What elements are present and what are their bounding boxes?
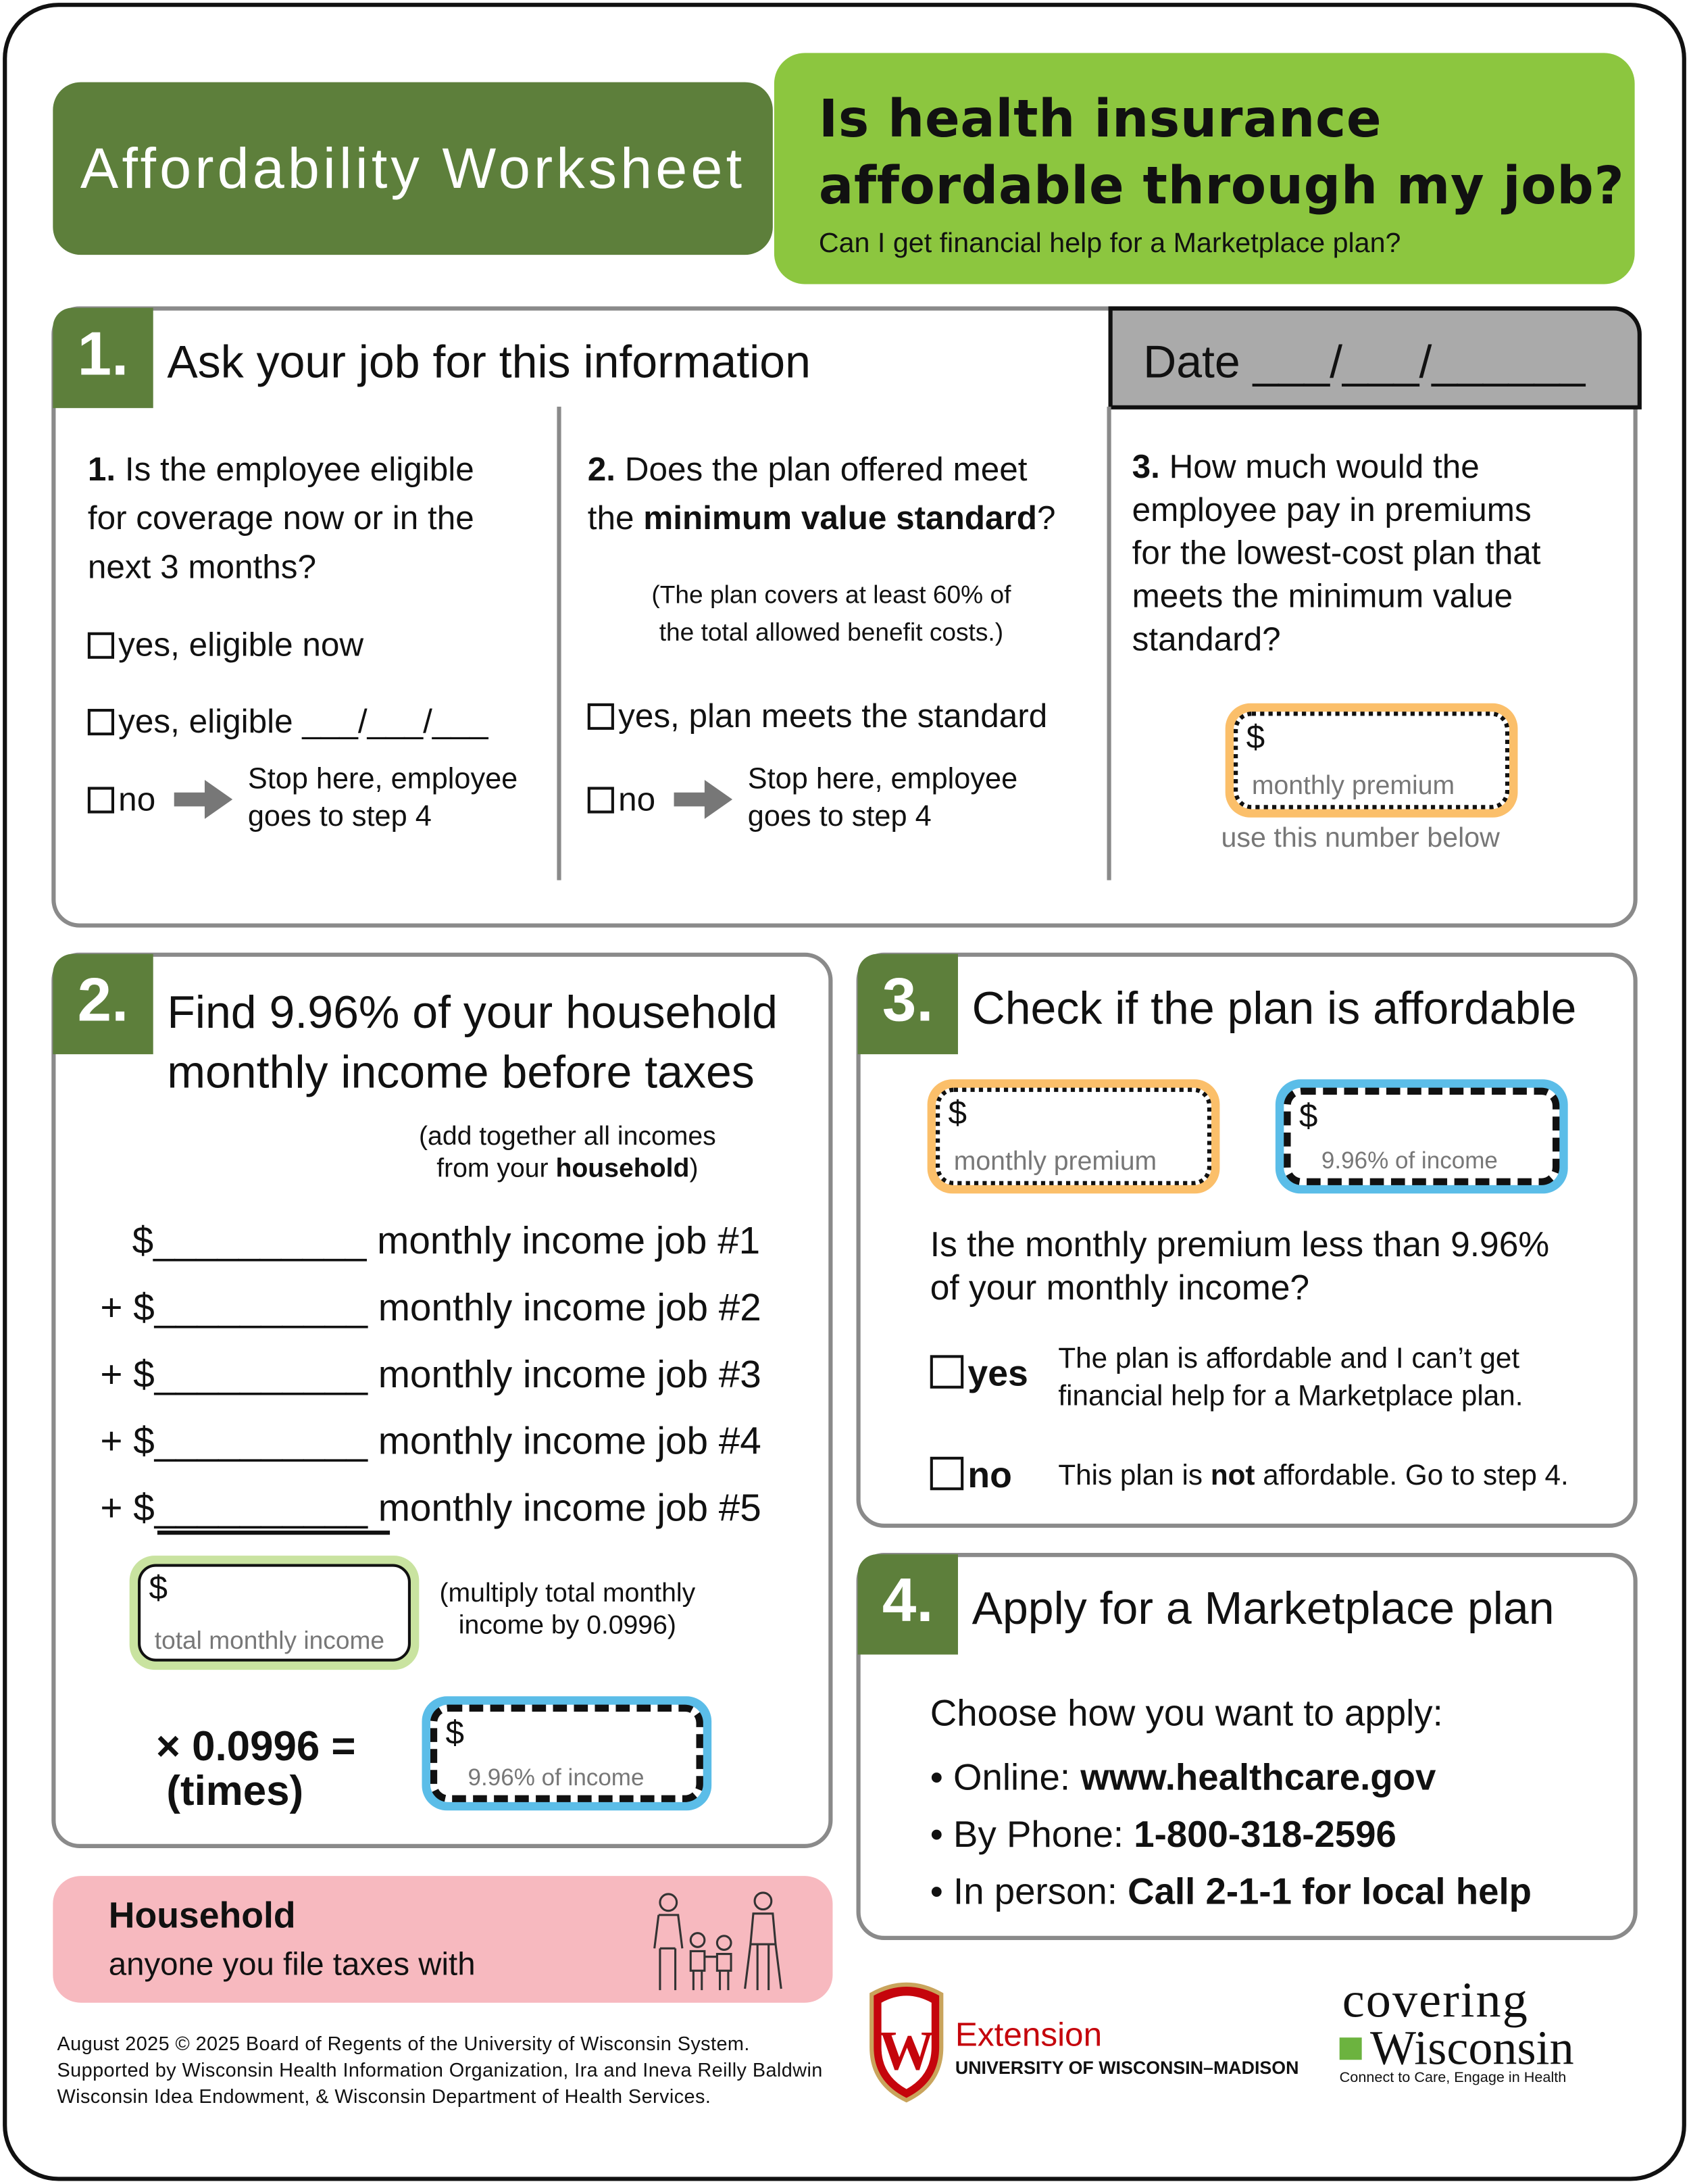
text: yes, plan meets the standard [618, 698, 1047, 735]
headline [819, 89, 1624, 216]
times: × 0.0996 = [156, 1724, 356, 1770]
no option: no [967, 1454, 1012, 1496]
step 2 heading: monthly income before taxes [167, 1046, 755, 1097]
income lines: + $__________ monthly income job #3 [100, 1352, 761, 1395]
footer credits: Wisconsin Idea Endowment, & Wisconsin Department of Health Services. [57, 2085, 711, 2107]
text: no [118, 781, 155, 819]
footer credits [57, 2032, 823, 2107]
yes option: yes [967, 1352, 1028, 1394]
panel: step 3 [857, 953, 1638, 1528]
number 1: 1. [78, 320, 128, 389]
note [419, 1122, 716, 1184]
income box: $ [1299, 1097, 1317, 1135]
logo: covering Wisconsin [1339, 1972, 1574, 2086]
multiply note: income by 0.0996) [459, 1612, 676, 1641]
question [930, 1226, 1549, 1308]
note: (add together all incomes [419, 1122, 716, 1151]
column: eligibility [88, 451, 518, 833]
question: of your monthly income? [930, 1269, 1309, 1308]
text: no [618, 781, 655, 819]
yes option [930, 1352, 1028, 1394]
text: Stop here, employee [748, 763, 1017, 795]
date box [1109, 306, 1642, 410]
panel: step 3: financial help for a Marketplace plan. [1058, 1380, 1523, 1412]
panel: step 2 [51, 953, 832, 1848]
9.96% box: 9.96% of income [468, 1764, 645, 1791]
question: Is the monthly premium less than 9.96% [930, 1226, 1549, 1264]
premium box [928, 1079, 1219, 1193]
text: the total allowed benefit costs.) [659, 618, 1003, 646]
total monthly income box: total monthly income [155, 1627, 384, 1654]
apply options: • In person: Call 2-1-1 for local help [930, 1870, 1532, 1912]
text: (The plan covers at least 60% of [651, 580, 1011, 609]
logo: UW Extension [869, 1983, 1299, 2103]
monthly premium box [1226, 703, 1517, 818]
number 1 [53, 307, 153, 408]
title: Affordability Worksheet [53, 82, 773, 255]
text: Stop here, employee [248, 763, 518, 795]
household definition: anyone you file taxes with [109, 1945, 476, 1982]
logo: covering Wisconsin: Wisconsin [1370, 2021, 1574, 2075]
icon: family [653, 1891, 782, 1991]
headline: affordable through my job? [819, 156, 1624, 216]
footer credits: August 2025 © 2025 Board of Regents of the University of Wisconsin System. [57, 2032, 750, 2054]
step 2 heading: Find 9.96% of your household [167, 986, 778, 1037]
multiply note: (multiply total monthly [440, 1579, 695, 1608]
note: from your household) [436, 1155, 698, 1184]
column: minimum value: 2. Does the plan offered meet the minimum value standard? [588, 451, 1056, 538]
apply options: Choose how you want to apply: [930, 1692, 1443, 1734]
apply options: • By Phone: 1-800-318-2596 [930, 1813, 1396, 1855]
headline box [774, 53, 1635, 284]
apply options [930, 1692, 1532, 1912]
income lines [100, 1218, 761, 1529]
number 4: 4. [882, 1567, 934, 1635]
logo: covering Wisconsin: Connect to Care, Engage in Health [1340, 2070, 1566, 2086]
title: Affordability Worksheet: Affordability Worksheet [80, 136, 745, 201]
number 2: 2. [78, 966, 128, 1035]
column: premium: 3. How much would the employee pay in premiums for the lowest-cost plan that meets the minimum value standard? [1132, 449, 1540, 659]
logo: UW Extension: W [878, 2020, 934, 2082]
apply options: • Online: www.healthcare.gov [930, 1756, 1436, 1798]
logo: covering Wisconsin: covering [1342, 1972, 1529, 2028]
household definition [53, 1876, 832, 2003]
subtitle: Can I get financial help for a Marketplace plan? [819, 228, 1401, 259]
income lines: + $__________ monthly income job #4 [100, 1419, 761, 1462]
no option [930, 1454, 1012, 1496]
number 2 [53, 954, 153, 1054]
income box [1276, 1079, 1568, 1193]
number 3 [858, 954, 958, 1054]
income lines: + $__________ monthly income job #5 [100, 1486, 761, 1529]
step 3 heading: Check if the plan is affordable [972, 982, 1576, 1033]
column: minimum value [588, 451, 1056, 833]
step 2 heading [167, 986, 778, 1097]
times [156, 1724, 356, 1814]
text: goes to step 4 [748, 801, 932, 833]
monthly premium box: $ [1246, 718, 1265, 756]
number 3: 3. [882, 966, 934, 1035]
text: goes to step 4 [248, 801, 432, 833]
step 4 heading: Apply for a Marketplace plan [972, 1582, 1555, 1634]
total monthly income box: $ [149, 1570, 168, 1607]
income box: 9.96% of income [1321, 1147, 1498, 1174]
multiply note [440, 1579, 696, 1641]
headline: Is health insurance [819, 89, 1382, 149]
9.96% box [422, 1696, 711, 1810]
income lines: $__________ monthly income job #1 [132, 1218, 760, 1262]
text: yes, eligible now [118, 626, 363, 664]
total monthly income box [130, 1556, 419, 1670]
step 1 heading: Ask your job for this information [167, 336, 811, 387]
9.96% box: $ [446, 1714, 464, 1752]
times: (times) [166, 1768, 303, 1814]
panel: step 1 [51, 306, 1638, 928]
panel: step 3: The plan is affordable and I can’t get [1058, 1343, 1519, 1374]
logo: UW Extension: Extension [955, 2016, 1102, 2054]
number 4 [858, 1554, 958, 1654]
logo: UW Extension: UNIVERSITY OF WISCONSIN–MADISON [955, 2057, 1299, 2078]
text: yes, eligible ___/___/___ [118, 703, 488, 741]
use this number below: use this number below [1221, 823, 1500, 853]
monthly premium box: monthly premium [1252, 772, 1455, 801]
panel: step 3: This plan is not affordable. Go to step 4. [1058, 1460, 1569, 1491]
household definition: Household [109, 1894, 296, 1936]
column: eligibility: 1. Is the employee eligible for coverage now or in the next 3 months? [88, 451, 474, 587]
date box: Date ___/___/______ [1143, 336, 1585, 387]
footer credits: Supported by Wisconsin Health Information Organization, Ira and Ineva Reilly Baldwin [57, 2058, 823, 2081]
panel: step 4 [857, 1553, 1638, 1940]
income lines: + $__________ monthly income job #2 [100, 1285, 761, 1329]
premium box: monthly premium [954, 1147, 1157, 1177]
premium box: $ [949, 1095, 967, 1133]
